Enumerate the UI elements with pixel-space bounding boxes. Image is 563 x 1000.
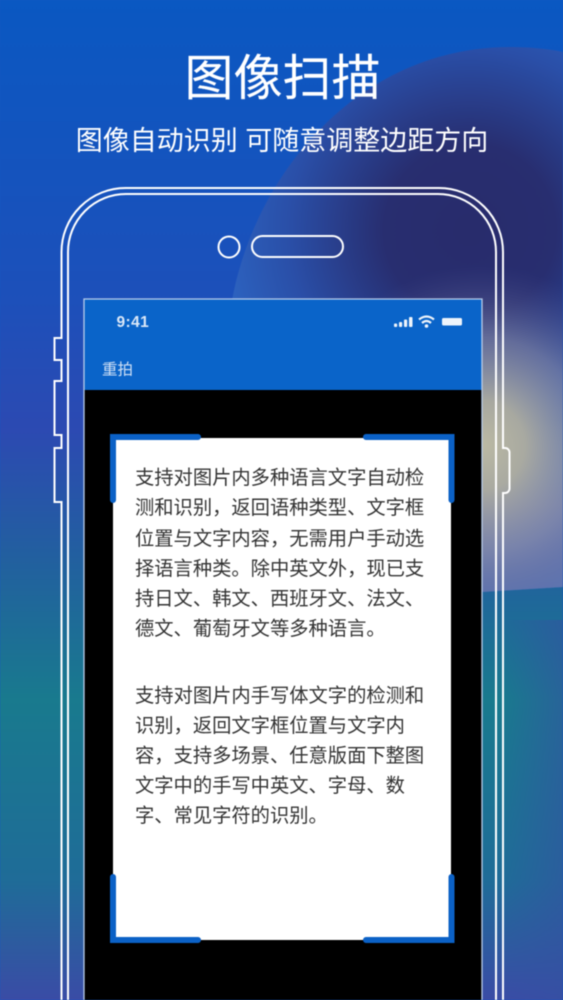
subtitle: 图像自动识别 可随意调整边距方向	[76, 126, 488, 156]
icon: phone speaker	[252, 236, 343, 257]
status icons	[394, 316, 462, 328]
paragraph 2: 识别，返回文字框位置与文字内	[135, 715, 405, 737]
back button label: 重拍	[102, 360, 133, 378]
crop corners	[113, 437, 452, 940]
paragraph 1: 支持对图片内多种语言文字自动检	[135, 467, 424, 489]
paragraph 2: 字、常见字符的识别。	[135, 805, 328, 827]
phone outline	[54, 188, 510, 1000]
paragraph 1: 持日文、韩文、西班牙文、法文、	[135, 588, 424, 610]
paragraph 2: 文字中的手写中英文、字母、数	[135, 775, 405, 797]
paragraph 1	[135, 467, 424, 640]
paragraph 2: 支持对图片内手写体文字的检测和	[135, 685, 424, 707]
paragraph 1: 位置与文字内容，无需用户手动选	[135, 528, 424, 550]
icon: phone camera	[218, 236, 240, 258]
paragraph 2: 容，支持多场景、任意版面下整图	[135, 745, 424, 767]
paragraph 1: 德文、葡萄牙文等多种语言。	[135, 618, 386, 640]
phone screen	[84, 299, 482, 1000]
title: 图像扫描	[184, 52, 381, 106]
paragraph 1: 测和识别，返回语种类型、文字框	[135, 497, 424, 519]
status time: 9:41	[116, 314, 149, 331]
app header bar	[84, 299, 482, 1000]
paragraph 1: 择语言种类。除中英文外，现已支	[135, 558, 424, 580]
scanned page	[113, 437, 452, 940]
paragraph 2	[135, 685, 424, 827]
